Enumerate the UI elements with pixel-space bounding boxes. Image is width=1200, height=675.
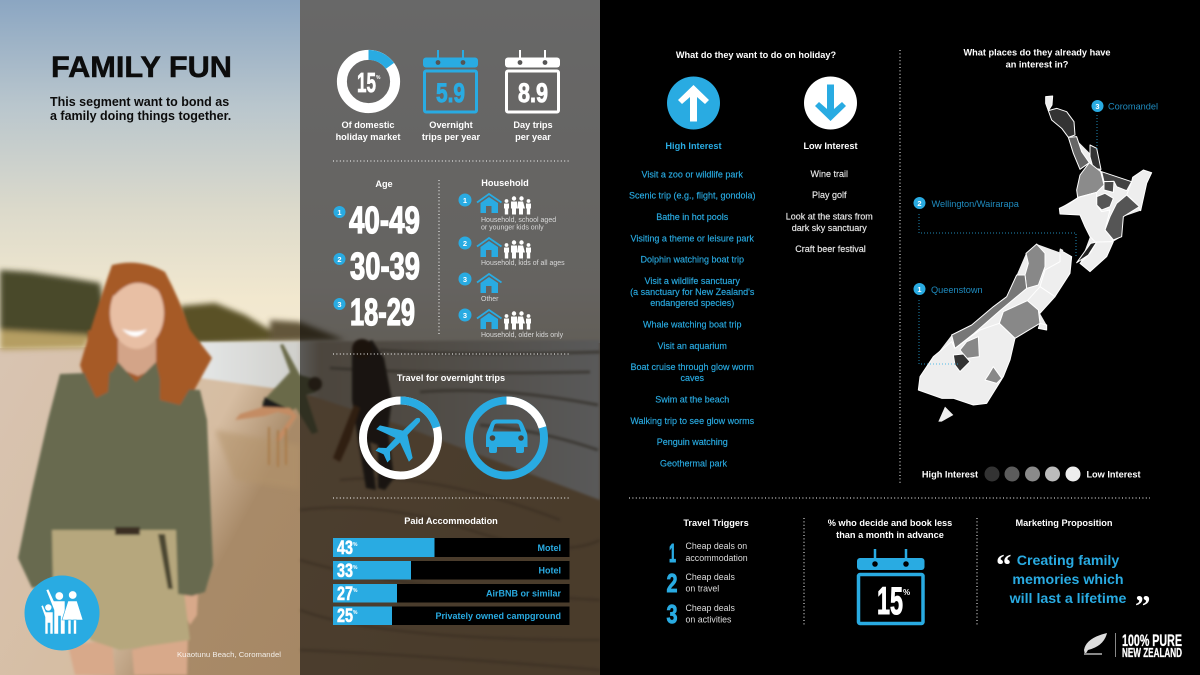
bar: motel bbox=[333, 538, 570, 559]
panel: household: or younger kids only bbox=[481, 224, 544, 232]
stat: overnight trips calendar: 5.9 bbox=[436, 78, 465, 108]
list: high interest: Walking trip to see glow worms bbox=[630, 416, 755, 426]
panel: travel triggers: Travel Triggers bbox=[683, 518, 749, 528]
callout: Wellington/Wairarapa bbox=[914, 197, 1076, 258]
panel: book less than a month in advance: % bbox=[903, 588, 910, 597]
panel: household: 3 bbox=[463, 311, 467, 320]
panel: travel triggers: accommodation bbox=[686, 553, 748, 563]
list: low interest: Look at the stars from bbox=[786, 212, 873, 222]
bar: hotel: % bbox=[353, 565, 358, 571]
panel: book less than a month in advance: than a month in advance bbox=[836, 530, 944, 540]
bar: airbnb: % bbox=[353, 588, 358, 594]
panel: household: Household bbox=[481, 178, 529, 188]
bar: hotel: Hotel bbox=[538, 566, 561, 576]
panel: travel triggers bbox=[666, 518, 750, 629]
list: low interest: Craft beer festival bbox=[795, 244, 866, 254]
legend: interest scale bbox=[922, 466, 1141, 482]
stat: day trips calendar: per year bbox=[515, 132, 551, 142]
people playing cricket bbox=[235, 339, 394, 490]
subheading: a family doing things together. bbox=[50, 109, 231, 123]
panel: travel triggers: on activities bbox=[686, 614, 732, 624]
panel: places of interest bbox=[914, 48, 1158, 482]
panel: household: 1 bbox=[463, 196, 467, 205]
callout: Queenstown bbox=[914, 283, 983, 364]
black right panel bbox=[600, 0, 1200, 675]
icon: family badge bbox=[24, 576, 100, 650]
subheading: This segment want to bond as bbox=[50, 95, 229, 109]
panel: age: 3 bbox=[337, 300, 342, 309]
panel: age: 30-39 bbox=[350, 246, 420, 288]
legend: interest scale: Low Interest bbox=[1086, 470, 1141, 480]
stat: overnight trips calendar: Overnight bbox=[429, 120, 473, 130]
bar: motel: % bbox=[353, 542, 358, 548]
panel: travel triggers: 1 bbox=[669, 538, 676, 568]
woman in green sweater bbox=[18, 263, 213, 675]
panel: age: Age bbox=[375, 179, 393, 189]
bar: hotel bbox=[333, 561, 570, 582]
stat: overnight trips calendar bbox=[422, 50, 481, 142]
list: high interest: Dolphin watching boat trip bbox=[640, 254, 744, 264]
list: high interest: endangered species) bbox=[650, 298, 734, 308]
callout: Coromandel: Coromandel bbox=[1108, 102, 1158, 112]
callout: Queenstown: 1 bbox=[917, 285, 922, 294]
panel: marketing proposition: memories which bbox=[1012, 572, 1124, 588]
stat: 15% of domestic market: % bbox=[376, 75, 381, 81]
bar: hotel: 33 bbox=[337, 561, 353, 582]
list: high interest: Penguin watching bbox=[657, 437, 728, 447]
list: high interest: Whale watching boat trip bbox=[643, 320, 742, 330]
list: high interest: (a sanctuary for New Zealand's bbox=[630, 287, 755, 297]
callout: Coromandel: 3 bbox=[1095, 102, 1100, 111]
panel: travel for overnight trips: Travel for overnight trips bbox=[397, 373, 505, 383]
panel: book less than a month in advance bbox=[828, 518, 952, 624]
panel: age: 40-49 bbox=[349, 200, 420, 242]
list: high interest: Visit an aquarium bbox=[658, 341, 727, 351]
dark overlay panel bbox=[300, 0, 600, 675]
icon: up arrow bbox=[667, 76, 720, 130]
panel: travel triggers: on travel bbox=[686, 584, 719, 594]
list: high interest: caves bbox=[680, 373, 704, 383]
panel: holiday activities: What do they want to do on holiday? bbox=[676, 50, 837, 60]
bar chart: paid accommodation bbox=[333, 516, 570, 627]
photo caption: Kuaotunu Beach, Coromandel bbox=[177, 650, 281, 659]
title block bbox=[50, 51, 232, 123]
panel: marketing proposition: will last a lifetime bbox=[1009, 591, 1126, 607]
panel: travel triggers: 3 bbox=[666, 599, 678, 629]
panel: holiday activities bbox=[629, 50, 875, 468]
stat: day trips calendar bbox=[505, 50, 560, 142]
list: high interest: Boat cruise through glow worm bbox=[630, 362, 754, 372]
panel: marketing proposition: ” bbox=[1135, 588, 1150, 623]
list: high interest: Bathe in hot pools bbox=[656, 212, 729, 222]
panel: book less than a month in advance: % who decide and book less bbox=[828, 518, 952, 528]
stat: overnight trips calendar: trips per year bbox=[422, 132, 481, 142]
panel: places of interest: an interest in? bbox=[1006, 60, 1069, 70]
panel: marketing proposition: “ bbox=[996, 547, 1012, 582]
map: New Zealand regions bbox=[918, 96, 1152, 422]
panel: age: 1 bbox=[337, 208, 342, 217]
panel: household: 3 bbox=[463, 275, 467, 284]
logo: 100% Pure New Zealand bbox=[1084, 631, 1182, 660]
panel: travel triggers: Cheap deals bbox=[686, 572, 735, 582]
callout: Queenstown: Queenstown bbox=[931, 285, 983, 295]
panel: travel for overnight trips bbox=[363, 373, 544, 476]
panel: age: 2 bbox=[337, 255, 342, 264]
list: high interest: Swim at the beach bbox=[655, 394, 729, 404]
bar: campground: 25 bbox=[337, 606, 353, 627]
panel: travel triggers: 2 bbox=[666, 568, 678, 598]
heading: FAMILY FUN bbox=[51, 51, 232, 84]
panel: holiday activities: High Interest bbox=[665, 141, 722, 151]
panel: marketing proposition: Creating family bbox=[1017, 553, 1119, 569]
bar: airbnb: 27 bbox=[337, 584, 353, 605]
list: high interest: Scenic trip (e.g., flight, gondola) bbox=[629, 190, 756, 200]
panel: household bbox=[458, 178, 565, 339]
panel: travel triggers: Cheap deals on bbox=[686, 541, 747, 551]
list: low interest: dark sky sanctuary bbox=[792, 223, 867, 233]
list: high interest: Visit a zoo or wildlife park bbox=[642, 170, 743, 180]
panel: age bbox=[334, 179, 420, 334]
list: low interest: Wine trail bbox=[810, 169, 848, 179]
stat: 15% of domestic market: 15 bbox=[357, 67, 376, 98]
panel: book less than a month in advance: 15 bbox=[877, 580, 903, 623]
list: high interest: Geothermal park bbox=[660, 458, 728, 468]
bar: airbnb: AirBNB or similar bbox=[486, 588, 561, 598]
bar: motel: Motel bbox=[538, 543, 561, 553]
background photo: Kuaotunu Beach bbox=[0, 0, 600, 675]
stat: 15% of domestic market: holiday market bbox=[336, 132, 400, 142]
bar: motel: 43 bbox=[337, 538, 353, 559]
panel: holiday activities: Low Interest bbox=[803, 141, 858, 151]
panel: household: Household, kids of all ages bbox=[481, 260, 565, 267]
car donut bbox=[469, 400, 544, 476]
bar: airbnb bbox=[333, 584, 570, 605]
list: low interest: Play golf bbox=[812, 190, 847, 200]
stat: day trips calendar: 8.9 bbox=[518, 78, 548, 108]
icon: down arrow bbox=[804, 76, 857, 130]
panel: places of interest: What places do they already have bbox=[963, 48, 1111, 58]
panel: household: Household, school aged bbox=[481, 217, 556, 224]
list: high interest: Visiting a theme or leisure park bbox=[631, 234, 754, 244]
list: high interest: Visit a wildlife sanctuary bbox=[645, 276, 740, 286]
panel: household: 2 bbox=[463, 239, 467, 248]
bar: campground bbox=[333, 606, 570, 627]
panel: household: Household, older kids only bbox=[481, 332, 564, 339]
panel: marketing proposition: Marketing Proposition bbox=[1016, 518, 1113, 528]
callout: Wellington/Wairarapa: Wellington/Wairarapa bbox=[932, 199, 1020, 209]
panel: age: 18-29 bbox=[350, 292, 415, 334]
stat: 15% of domestic market: Of domestic bbox=[341, 120, 395, 130]
plane donut bbox=[363, 400, 438, 476]
panel: household: Other bbox=[481, 296, 499, 303]
callout: Wellington/Wairarapa: 2 bbox=[917, 199, 922, 208]
callout: Coromandel bbox=[1092, 100, 1158, 150]
bar chart: paid accommodation: Paid Accommodation bbox=[404, 516, 498, 526]
bar: campground: % bbox=[353, 610, 358, 616]
stat: 15% of domestic market bbox=[336, 55, 400, 142]
panel: marketing proposition bbox=[996, 518, 1150, 623]
legend: interest scale: High Interest bbox=[922, 470, 978, 480]
bar: campground: Privately owned campground bbox=[435, 611, 561, 621]
stat: day trips calendar: Day trips bbox=[513, 120, 553, 130]
panel: travel triggers: Cheap deals bbox=[686, 603, 735, 613]
